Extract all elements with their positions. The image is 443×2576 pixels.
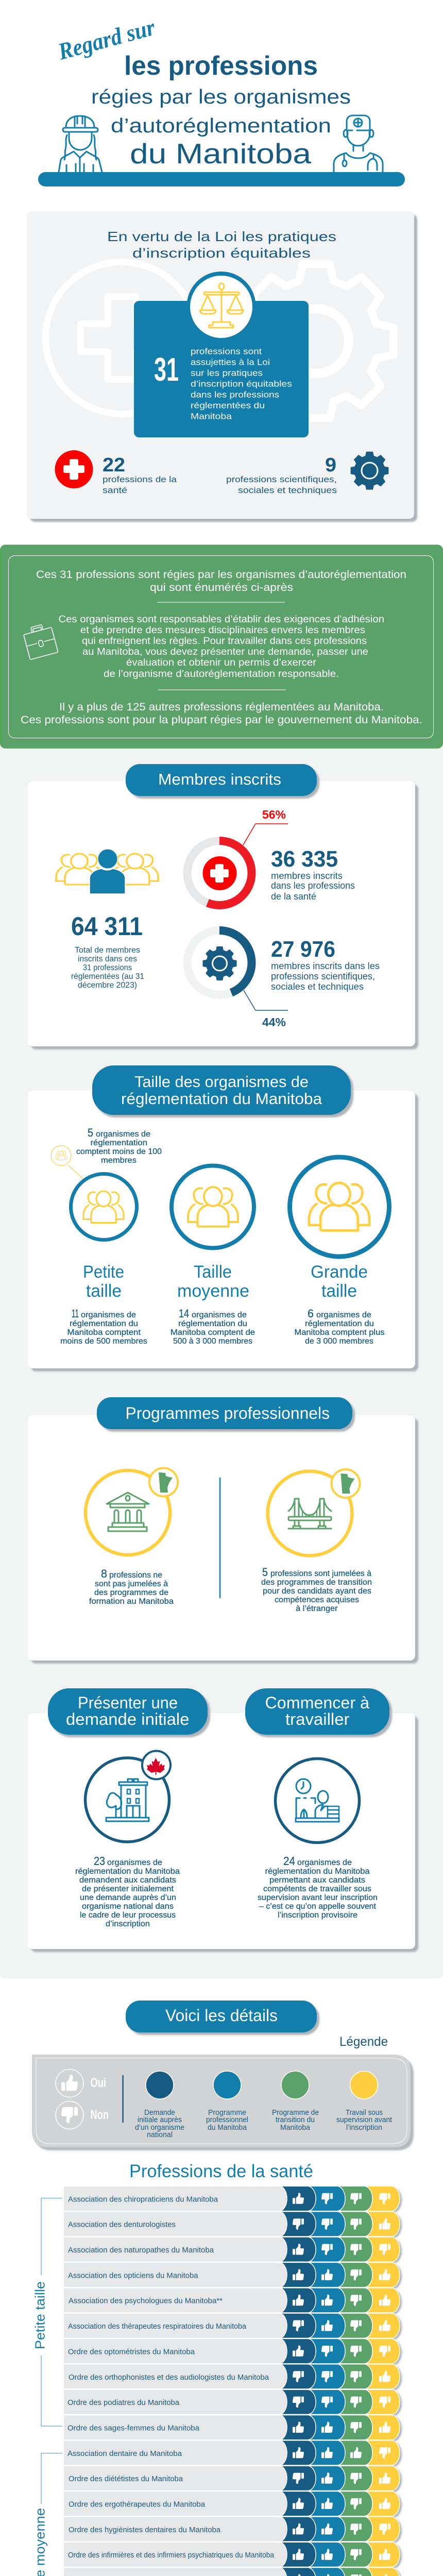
donut chart: health 56% [188,841,251,905]
gray section background [0,742,443,1978]
program: bridging: professions sont jumelées à [270,1569,371,1578]
callout: under 100 members: comptent moins de 100 [76,1147,162,1156]
legend: initial national application [135,2071,184,2139]
panel: initial application and start work [28,1688,415,1949]
card text: d’inscription équitables [191,379,292,389]
icon: institution [107,1493,149,1531]
legend: supervised work before registration [336,2071,393,2132]
heading [107,229,336,261]
heading pill: details [126,2001,317,2032]
stat: science members [271,937,380,992]
title block [38,13,405,187]
size column: small: Manitoba comptent [67,1328,141,1337]
size column: small: réglementation du [70,1319,138,1328]
legend: Manitoba professional program: professionnel [206,2115,248,2124]
size column: large: 6 [308,1307,314,1320]
stat: science professions [226,452,388,495]
row: thérapeutes respiratoires: Association des thérapeutes respiratoires du Manitoba [68,2323,247,2331]
legend: Manitoba bridging program: Programme de [272,2108,319,2117]
icon: supervised work [296,1779,339,1822]
column: initial application: une demande auprès d’un [80,1893,176,1902]
column: start working [258,1759,378,1920]
row: hygiénistes dentaires [63,2517,402,2543]
program: no Manitoba training: professions ne [109,1571,162,1580]
row: optométristes [63,2338,402,2365]
closing text: Il y a plus de 125 autres professions réglementées au Manitoba. [59,701,384,713]
stat: science members: 27 976 [271,937,335,962]
size column: medium: 500 à 3 000 membres [173,1337,252,1346]
row: orthophonistes [63,2364,402,2391]
stat: health members: 36 335 [271,846,338,872]
size column: medium: organismes de [192,1311,247,1319]
stat: health professions [55,450,177,495]
row: sages-femmes: Ordre des sages-femmes du Manitoba [67,2425,200,2433]
column: initial application: 23 [94,1854,105,1868]
panel: professional programs [28,1397,415,1660]
heading pill: Taille des organismes de [134,1073,309,1091]
callout: under 100 members: 5 [88,1126,93,1139]
stat: health professions: 22 [103,454,125,476]
program: no Manitoba training: formation au Manitoba [89,1597,174,1606]
callout: 44% [244,990,288,1029]
stat: science members: sociales et techniques [271,981,364,992]
size column: medium: Taille [194,1262,232,1282]
heading pill: initial application: demande initiale [66,1710,190,1728]
heading pill shadow [99,1400,355,1432]
size column: medium: réglementation du [178,1319,247,1328]
size column: medium: Manitoba comptent de [171,1328,255,1337]
legend: supervised work before registration: l’inscription [346,2123,382,2132]
heading pill: Membres inscrits [158,770,281,788]
callout: 44%: 44% [262,1015,286,1029]
size column: large: de 3 000 membres [305,1337,373,1346]
closing text: Ces professions sont pour la plupart régies par le gouvernement du Manitoba. [21,714,422,726]
size column: small: 11 [72,1307,79,1320]
white badge circle [190,276,252,338]
row: infirmiers psychiatriques: Ordre des infirmières et des infirmiers psychiatriques du Manitoba [68,2551,275,2560]
row: sages-femmes [63,2415,402,2442]
stat: health members: membres inscrits [271,871,343,881]
body text: évaluation et obtenir un permis d’exercer [126,657,317,668]
icon: red cross [55,450,93,488]
intro text [36,569,406,594]
size column: large: taille [321,1281,357,1301]
legend: initial national application: d’un organisme [135,2123,184,2132]
row: dentaire: Association dentaire du Manitoba [67,2450,182,2458]
size column: large: Grande [311,1262,368,1282]
column: initial application: le cadre de leur processus [80,1911,176,1920]
title line 3: d’autoréglementation [111,115,331,137]
row: naturopathes: Association des naturopathes du Manitoba [68,2246,214,2255]
callout: under 100 members [51,1126,162,1179]
size column: large [289,1157,389,1346]
heading pill: initial application: Présenter une [78,1693,178,1712]
stat: science members: professions scientifiques, [271,971,375,981]
stat: health professions: santé [103,485,127,495]
column: start working: – c’est ce qu’on appelle souvent [259,1902,377,1911]
pill shadows [50,1691,392,1737]
row: pharmaciens [63,2568,402,2576]
legend: yes [56,2069,106,2097]
blue card [134,301,309,437]
heading pill: réglementation du Manitoba [121,1090,322,1108]
row: denturologistes [63,2212,402,2238]
heading pill [92,1065,351,1115]
blue badge arc [186,272,255,341]
size column: small: taille [86,1281,122,1301]
panel: size of regulators [28,1065,415,1368]
ghost icon: medical cross [45,262,198,414]
icon: dark gear [351,452,388,489]
intro text: Ces 31 professions sont régies par les organismes d’autoréglementation [36,569,406,581]
side label: health small: Petite taille [32,2281,48,2349]
column: start working: l’inscription provisoire [278,1911,357,1920]
row: diététistes [63,2466,402,2492]
callout: under 100 members: réglementation [91,1139,147,1147]
total caption: décembre 2023) [78,981,137,990]
callout: under 100 members: membres [101,1156,137,1165]
legend: Manitoba bridging program: Manitoba [280,2123,311,2132]
icon: maple leaf [147,1758,165,1775]
size column: large: réglementation du [305,1319,374,1328]
heading pill: start working [245,1688,389,1735]
heading pill: initial application [48,1688,208,1735]
panel shadow: programs [31,1418,418,1664]
row: thérapeutes respiratoires [63,2313,402,2340]
program: no Manitoba training: des programmes de [94,1588,168,1597]
heading pill: details: Voici les détails [165,2006,278,2025]
stat: health members: dans les professions [271,880,355,891]
title line 2: régies par les organismes [91,86,351,108]
icon: doctor [334,115,383,172]
panel shadow: members [31,784,418,1049]
legend: Manitoba bridging program: transition du [276,2115,315,2124]
heading pill shadow [95,1068,353,1117]
row: chiropraticiens [63,2186,402,2213]
total caption: réglementées (au 31 [71,972,144,981]
row: orthophonistes: Ordre des orthophonistes et des audiologistes du Manitoba [69,2374,269,2382]
total number: 64 311 [71,912,143,941]
card text: Manitoba [191,411,232,421]
legend: supervised work before registration: supervision avant [336,2115,393,2124]
card text: assujetties à la Loi [191,358,270,367]
row: denturologistes: Association des denturologistes [68,2221,176,2229]
heading pill [126,764,317,796]
legend: Manitoba professional program: Programme [208,2108,246,2117]
legend: initial national application: national [147,2130,173,2139]
column: start working: permettant aux candidats [269,1876,365,1885]
legend shadow [35,2058,414,2150]
size column: medium [171,1165,255,1346]
icon: building [106,1779,149,1821]
heading: En vertu de la Loi les pratiques [107,229,336,244]
row: ergothérapeutes: Ordre des ergothérapeutes du Manitoba [69,2501,206,2509]
legend panel [32,2055,411,2147]
stat: health professions: professions de la [103,474,177,484]
title base bar [38,172,405,187]
column: initial application: d’inscription [106,1920,150,1928]
card text [191,347,292,421]
icon: briefcase [22,622,58,659]
panel shadow: sizes [31,1094,418,1371]
callout: under 100 members: organismes de [96,1130,150,1139]
row: naturopathes [63,2237,402,2263]
legend title: Légende [339,2035,388,2049]
panel: law summary shadow [30,214,417,522]
program: bridging: à l’étranger [296,1604,338,1613]
title line 1: les professions [124,51,318,81]
icon: scales of justice [200,283,243,328]
row: infirmiers psychiatriques [63,2542,402,2569]
stat: health members: de la santé [271,891,316,902]
total caption: Total de membres [75,946,140,955]
panel: green information box [1,545,442,748]
legend: initial national application: initiale auprès [138,2115,182,2124]
size column: small: Petite [83,1262,124,1282]
row: psychologues: Association des psychologues du Manitoba** [69,2297,223,2306]
body text: Ces organismes sont responsables d’établir des exigences d’adhésion [59,614,384,625]
row: ergothérapeutes [63,2492,402,2518]
row: dentaire [63,2441,402,2467]
side label: health medium [32,2453,62,2576]
callout: 56%: 56% [262,808,286,821]
column: initial application: de présenter initialement [82,1885,174,1893]
size column: medium: moyenne [177,1281,249,1301]
program: bridging [261,1469,372,1613]
intro text: qui sont énumérés ci-après [150,582,293,594]
column: start working: compétents de travailler sous [263,1885,371,1893]
column: initial application: demandent aux candidats [79,1876,176,1885]
program: bridging: compétences acquises [275,1596,359,1604]
legend: Manitoba bridging program [272,2071,319,2132]
size column: small: organismes de [81,1311,136,1319]
heading pill: Programmes professionnels [126,1404,330,1422]
heading: d’inscription équitables [132,245,311,261]
program: no Manitoba training [86,1468,178,1606]
stat: science professions: professions scientifiques, [226,474,337,484]
heading: health professions: Professions de la santé [129,2161,313,2181]
body text: et de prendre des mesures disciplinaires envers les membres [80,625,365,636]
column: initial application: organisme national dans [82,1902,174,1911]
row: podiatres [63,2389,402,2416]
donut chart: science 44% [188,930,251,995]
column: initial application: organismes de [107,1858,162,1867]
pill shadow: details [128,2003,319,2035]
heading pill [97,1397,352,1429]
side label: health small [32,2198,62,2426]
row: diététistes: Ordre des diététistes du Manitoba [69,2475,183,2483]
legend: supervised work before registration: Travail sous [346,2108,383,2117]
table: health professions [63,2186,402,2576]
program: bridging: 5 [262,1566,268,1579]
program: no Manitoba training: 8 [101,1567,107,1580]
panel: registered members [28,764,415,1046]
closing text [21,701,422,726]
legend: yes: Oui [91,2076,106,2090]
card text: réglementées du [191,401,265,411]
size column: small [60,1174,147,1346]
row: optométristes: Ordre des optométristes du Manitoba [68,2348,195,2356]
callout: 56% [243,808,288,845]
row: hygiénistes dentaires: Ordre des hygiénistes dentaires du Manitoba [69,2526,221,2534]
size column: large: Manitoba comptent plus [295,1328,385,1337]
card text: dans les professions [191,390,279,400]
heading pill: start working: Commencer à [265,1693,369,1712]
body text [59,614,384,680]
row: opticiens [63,2262,402,2289]
total caption: 31 professions [83,963,132,972]
legend: initial national application: Demande [144,2108,175,2117]
column: start working: organismes de [297,1858,352,1867]
column: initial application [75,1751,180,1928]
legend: Manitoba professional program [206,2071,248,2132]
program: bridging: pour des candidats ayant des [263,1587,371,1596]
row: chiropraticiens: Association des chiropraticiens du Manitoba [68,2195,218,2204]
legend: no: Non [91,2108,109,2122]
ghost icon: gear [239,264,394,418]
icon: construction worker [59,116,102,172]
total caption: inscrits dans ces [78,955,137,963]
panel shadow: apply and work [31,1716,418,1952]
body text: qui enfreignent les règles. Pour travailler dans ces professions [82,636,367,647]
script tagline: Regard sur [55,13,158,65]
column: start working: 24 [283,1854,295,1868]
stat: science members: membres inscrits dans les [271,961,380,971]
stat: science professions: sociales et techniques [238,485,337,495]
icon: group of people [56,849,158,894]
size column: medium: 14 [179,1307,189,1320]
legend: Manitoba professional program: du Manitoba [208,2123,247,2132]
column: initial application: réglementation du Manitoba [75,1867,180,1876]
stat: science professions: 9 [325,454,336,476]
column: start working: réglementation du Manitoba [265,1867,370,1876]
program: bridging: des programmes de transition [261,1578,372,1587]
size column: large: organismes de [316,1311,371,1319]
title line 4: du Manitoba [130,138,311,170]
stat: health members [271,846,355,902]
total caption [71,946,144,990]
heading pill shadow [128,767,319,799]
big number: 31 [154,351,179,388]
row: podiatres: Ordre des podiatres du Manitoba [67,2399,180,2407]
body text: de l’organisme d’autoréglementation responsable. [104,669,339,680]
legend: no [56,2101,109,2129]
icon: bridge [288,1499,331,1529]
size column: small: moins de 500 membres [60,1337,147,1346]
card text: sur les pratiques [191,368,263,378]
panel: law summary [27,211,414,519]
program: no Manitoba training: sont pas jumelées à [95,1580,168,1588]
heading pill: start working: travailler [285,1710,350,1728]
row: opticiens: Association des opticiens du Manitoba [68,2272,198,2280]
row: psychologues [63,2288,402,2314]
column: start working: supervision avant leur inscription [258,1893,378,1902]
body text: au Manitoba, vous devez présenter une demande, passer une [82,647,368,657]
card text: professions sont [191,347,262,357]
